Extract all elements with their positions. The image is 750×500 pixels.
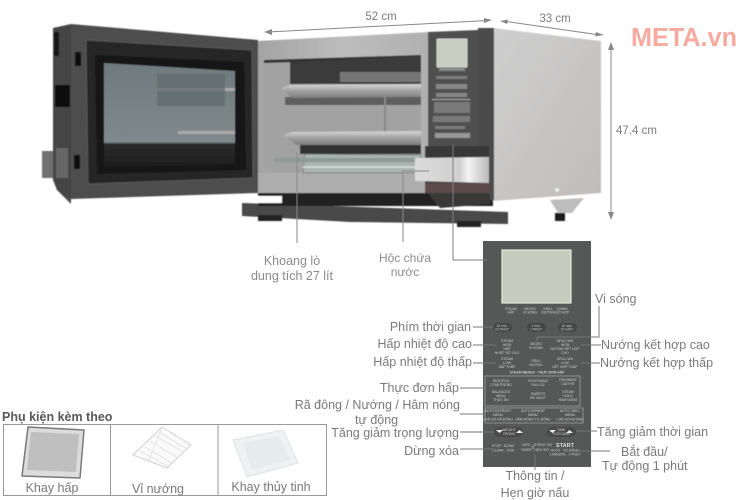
callout: water tank: Hộc chứa: [379, 251, 431, 265]
weight and time arrows: WEIGHT: [502, 428, 516, 432]
time buttons: 1 min.: [531, 324, 541, 328]
oven cavity: [264, 55, 421, 173]
cooking mode buttons: VI SÓNG: [529, 345, 543, 350]
label: grill mix low: Nướng kết hợp thấp: [600, 356, 713, 370]
label: start: Bắt đầu/: [621, 444, 668, 459]
bottom buttons: [492, 442, 580, 456]
weight and time arrows: TIME: [557, 428, 566, 432]
door window glass: [104, 63, 235, 167]
callout: water tank: [379, 171, 431, 279]
bottom buttons: AUTO · TỰ ĐỘNG: [551, 448, 580, 452]
lower panel housing: [425, 146, 490, 208]
steam menu box: HOLD: [563, 394, 573, 398]
mode labels: MICRO: [524, 307, 536, 311]
cooking mode buttons: GRILL: [531, 359, 541, 363]
accessory: steam tray: [22, 427, 84, 495]
cooking mode buttons: STEAM: [501, 339, 513, 343]
cooking mode buttons: LOW: [503, 361, 512, 365]
auto programme box: MENU: [493, 413, 504, 417]
auto programme box: AUTO DEFROST: [485, 409, 511, 413]
accessory: glass tray: Khay thủy tinh: [231, 480, 311, 494]
oven front frame: [258, 32, 430, 197]
callout: cavity: [251, 152, 334, 283]
accessory: steam tray: Khay hấp: [26, 481, 78, 495]
label: info and timer: [501, 455, 569, 500]
mode labels: GRILL: [543, 307, 553, 311]
right labels: [537, 292, 713, 473]
steam menu box: VEGETABLE: [528, 379, 549, 383]
cooking mode buttons: STEAM: [501, 357, 513, 361]
mode labels: [505, 307, 570, 314]
bottom buttons: START: [556, 443, 575, 449]
cooking mode buttons: HẤP THẤP: [499, 365, 516, 369]
label: auto programmes: tự động: [355, 413, 398, 427]
cooking mode buttons: GRILL MIX: [557, 357, 574, 361]
oven control panel: [428, 30, 478, 146]
time buttons: 10 sec.: [562, 324, 573, 328]
door handle block: [42, 151, 56, 178]
steam menu box: HÂM NÓNG: [559, 397, 578, 402]
time buttons: 10 GIÂY: [561, 328, 574, 332]
dark front strip: [478, 28, 494, 200]
label: stop: [404, 444, 494, 458]
bottom buttons: CLEAR · XÓA: [492, 448, 514, 452]
label: auto programmes: [295, 398, 485, 427]
steam menu box: RICE/EGG: [493, 379, 510, 383]
cooking mode buttons: HIGH: [561, 343, 570, 347]
accessory: grill rack: Vỉ nướng: [132, 482, 184, 496]
mode labels: HẤP: [508, 310, 515, 314]
dimension: width: [264, 11, 492, 35]
steam menu box: THỨC ĂN: [493, 397, 509, 402]
time buttons: 10 min.: [496, 324, 508, 328]
lower rack: [283, 131, 421, 145]
auto programme box: HÂM NÓNG TỰ ĐỘNG: [515, 416, 551, 422]
accessory: grill rack: [132, 427, 191, 496]
cooking mode buttons: NHIỆT ĐỘ CAO: [495, 350, 520, 355]
steam menu box: CÁ/THỊT: [561, 382, 575, 386]
steam menu box: FISH/MEAT: [559, 378, 577, 382]
accessories panel: [4, 424, 326, 496]
label: steam low: Hấp nhiệt độ thấp: [373, 355, 472, 369]
upper rack: [281, 84, 421, 98]
mode labels: KẾT HỢP: [554, 310, 570, 314]
label: start: [575, 444, 688, 473]
time buttons: 10 PHÚT: [495, 326, 509, 332]
callout: water tank: nước: [391, 265, 419, 279]
left labels: [295, 320, 496, 458]
oven foot: [550, 198, 584, 221]
logo: META.vn: [631, 24, 737, 52]
LCD display: [502, 250, 571, 303]
bottom buttons: TIMER · HẸN GIỜ: [521, 447, 549, 452]
callout: cavity: Khoang lò: [264, 254, 320, 268]
auto programme box: AUTO REHEAT: [521, 409, 545, 413]
dimension: height: 47.4 cm: [616, 125, 657, 137]
dimension: height: [608, 42, 657, 220]
auto programme box: MENU: [528, 413, 539, 417]
auto programme box: CHẾ ĐỘ RÃ ĐÔNG: [483, 416, 513, 422]
label: stop: Dừng xóa: [404, 444, 459, 458]
bottom buttons: 1 MINUTE · 1 PHÚT: [550, 452, 580, 456]
steam menu box: [485, 370, 580, 406]
bottom buttons: INFO · THÔNG TIN: [522, 442, 552, 447]
label: info and timer: Hẹn giờ nấu: [501, 486, 569, 500]
dimension: depth: [500, 13, 604, 36]
time buttons: [493, 323, 577, 332]
cooking mode buttons: HIGH: [503, 343, 512, 347]
steam menu box: RAU CỦ: [532, 382, 545, 387]
label: time adjust: Tăng giảm thời gian: [597, 425, 708, 439]
oven door: [53, 24, 258, 204]
cooking mode buttons: CAO: [561, 351, 569, 355]
label: steam high: Hấp nhiệt độ cao: [377, 337, 472, 351]
grill rack: [303, 154, 421, 173]
steam menu box: ĐỒ NGỌT: [530, 395, 546, 400]
auto programme box: [483, 408, 584, 423]
oven photo: [42, 24, 601, 227]
cooking mode buttons: NƯỚNG KẾT HỢP: [550, 346, 580, 351]
steam menu box: BALANCED: [492, 390, 511, 394]
weight and time arrows: TRỌNG: [503, 432, 515, 436]
label: steam menu: Thực đơn hấp: [380, 381, 459, 395]
base tray: [242, 203, 508, 227]
auto programme box: CHẾ ĐỘ NƯỚNG: [556, 416, 584, 422]
weight and time arrows: [494, 427, 576, 437]
side panel: [493, 28, 601, 201]
label: auto programmes: Rã đông / Nướng / Hâm nóng: [295, 398, 460, 412]
dimension: width: 52 cm: [365, 11, 397, 23]
auto programme box: MENU: [565, 413, 576, 417]
accessory: glass tray: [231, 430, 311, 494]
cooking mode buttons: LOW: [561, 361, 570, 365]
mode labels: COMBI: [556, 307, 568, 311]
label: time keys: Phím thời gian: [390, 320, 471, 334]
connector: panel to oven: [453, 145, 487, 260]
callout: cavity: dung tích 27 lít: [251, 269, 334, 283]
label: info and timer: Thông tin /: [505, 469, 565, 483]
label: microwave: Vi sóng: [595, 292, 637, 306]
steam menu box: STEAM: [562, 390, 574, 394]
time buttons: 1 PHÚT: [530, 326, 542, 332]
steam menu box: STEAM MENUS · THỰC ĐƠN HẤP: [510, 370, 565, 374]
cooking mode buttons: NƯỚNG: [529, 362, 543, 367]
weight and time arrows: THỜI GIAN: [552, 431, 570, 436]
label: grill mix high: Nướng kết hợp cao: [601, 338, 710, 352]
bottom buttons: i: [532, 445, 534, 451]
cooking mode buttons: GRILL MIX: [557, 339, 574, 343]
bottom buttons: STOP · DỪNG: [492, 443, 515, 448]
auto programme box: AUTO GRILL: [560, 409, 580, 413]
label: microwave: [537, 292, 637, 341]
cooking mode buttons: MICRO: [530, 342, 542, 346]
cooking mode buttons: KẾT HỢP THẤP: [553, 364, 578, 369]
steam menu box: MEAL: [496, 394, 506, 398]
dimension: depth: 33 cm: [539, 13, 571, 25]
mode labels: STEAM: [505, 307, 517, 311]
mode labels: NƯỚNG: [541, 310, 555, 314]
water tank: [415, 157, 489, 183]
control panel enlarged: [483, 241, 591, 467]
mode labels: VI SÓNG: [523, 310, 537, 314]
accessories heading: Phụ kiện kèm theo: [2, 410, 113, 424]
label: start: Tự động 1 phút: [602, 459, 688, 473]
steam menu box: CƠM/TRỨNG: [490, 382, 512, 387]
cooking mode buttons: [495, 339, 580, 369]
label: weight: Tăng giảm trọng lượng: [331, 426, 459, 440]
cooking mode buttons: HẤP: [504, 347, 511, 351]
steam menu box: SWEETS: [531, 392, 546, 396]
